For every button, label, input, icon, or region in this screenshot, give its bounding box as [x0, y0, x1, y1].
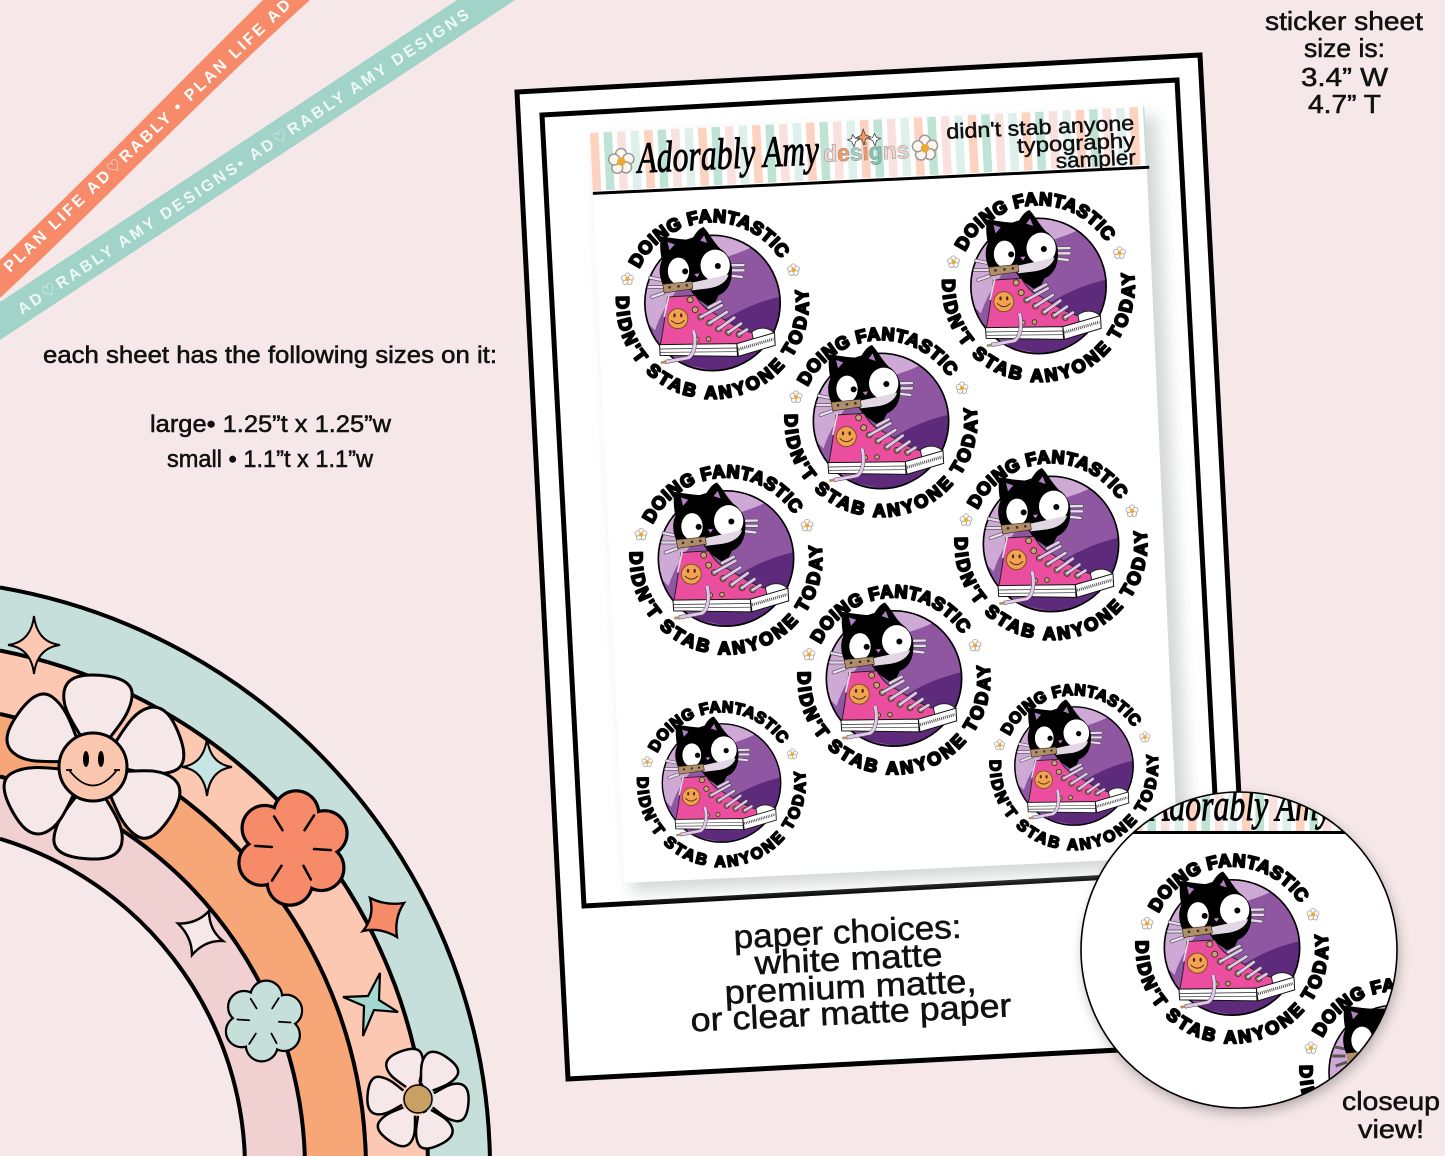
sticker 8 daisies — [994, 732, 1150, 750]
lens header stripes — [1136, 792, 1342, 831]
lens main sticker — [1134, 853, 1330, 1044]
text: paper choices — [690, 908, 1012, 1039]
text: sticker sheet size: sticker sheet — [1265, 6, 1424, 36]
sticker 1: DIDN'T STAB ANYONE TODAY — [615, 289, 810, 400]
sticker 2 daisies — [948, 247, 1126, 268]
icon: white star — [178, 911, 223, 955]
lens partial sticker — [1298, 978, 1393, 1094]
text: sticker sheet size: 3.4” W — [1301, 62, 1389, 92]
text: sizes on each sheet: small • 1.1”t x 1.1”w — [167, 446, 374, 473]
lens partial sticker: DOING FA — [1311, 978, 1393, 1038]
sticker 5 — [954, 450, 1148, 641]
sticker 6 daisies — [803, 639, 981, 660]
sticker 7 small: DIDN'T STAB ANYONE TODAY — [636, 771, 806, 868]
sticker 4 daisies — [635, 519, 813, 540]
sticker 8 small: DIDN'T STAB ANYONE TODAY — [989, 754, 1159, 851]
lens header rule — [1125, 831, 1355, 834]
lens main sticker: DOING FANTASTIC — [1147, 853, 1309, 914]
icon: smiley daisy — [0, 673, 191, 861]
logo daisy right — [912, 135, 938, 160]
sticker 6 — [796, 584, 992, 776]
icon: teal sparkle — [182, 738, 232, 796]
closeup lens shadow — [1083, 797, 1399, 1113]
sticker 1: DOING FANTASTIC — [628, 208, 790, 269]
header rule — [593, 166, 1149, 195]
sticker 3 — [784, 326, 978, 518]
text: sizes on each sheet — [43, 342, 497, 473]
logo sparkles — [847, 128, 881, 147]
partial sticker daisy — [1305, 1042, 1317, 1054]
header title: didn't stab anyone — [946, 112, 1135, 144]
sticker 3: DOING FANTASTIC — [796, 326, 958, 387]
text: paper choices: or clear matte paper — [690, 986, 1012, 1039]
text: sticker sheet size: 4.7” T — [1308, 89, 1381, 119]
ribbon: coral plan life adorably: PLAN LIFE AD♡RABLY • PLAN LIFE AD — [1, 0, 294, 276]
sticker 7 small: DOING FANTASTIC — [647, 700, 789, 753]
sticker 6: DOING FANTASTIC — [809, 584, 971, 644]
sticker 8 small — [989, 683, 1159, 851]
icon: peach sparkle — [8, 616, 60, 674]
icon: teal star — [343, 973, 398, 1036]
sheet header — [590, 107, 1149, 195]
logo designs: designs — [823, 137, 910, 168]
lens main sticker: DIDN'T STAB ANYONE TODAY — [1134, 934, 1330, 1044]
sticker 1 — [615, 208, 810, 400]
sticker 5: DIDN'T STAB ANYONE TODAY — [954, 530, 1148, 641]
sticker 8 small: DOING FANTASTIC — [1000, 683, 1142, 736]
lens sticker daisies — [1141, 908, 1319, 929]
text: paper choices: white matte — [753, 936, 943, 981]
lens partial sticker: DID — [1298, 1065, 1315, 1094]
header stripes — [590, 107, 1147, 191]
logo script: Adorably Amy — [634, 125, 821, 183]
sticker 2 — [941, 192, 1136, 383]
text: closeup view — [1342, 1086, 1440, 1144]
sticker 6: DIDN'T STAB ANYONE TODAY — [796, 664, 992, 776]
ribbon: teal adorably amy designs: AD♡RABLY AMY DESIGNS• AD♡RABLY AMY DESIGNS — [15, 6, 473, 318]
text: sizes on each sheet: each sheet has the following sizes on it: — [43, 342, 497, 369]
sticker 5 daisies — [960, 505, 1138, 526]
sticker 2: DIDN'T STAB ANYONE TODAY — [941, 272, 1136, 383]
text: closeup view: view! — [1358, 1114, 1424, 1144]
sticker sheet — [590, 107, 1178, 883]
text: sticker sheet size — [1265, 6, 1424, 119]
sticker 4: DIDN'T STAB ANYONE TODAY — [628, 544, 824, 656]
sticker 3 daisies — [790, 382, 968, 402]
outer white frame — [517, 55, 1252, 1079]
header title — [946, 112, 1137, 178]
header title: typography — [1017, 129, 1136, 158]
icon: coral star — [363, 898, 404, 937]
header title: sampler — [1055, 146, 1136, 173]
text: sticker sheet size: size is: — [1304, 33, 1385, 63]
sticker 4: DOING FANTASTIC — [641, 464, 803, 524]
text: paper choices: paper choices: — [733, 908, 962, 955]
text: sizes on each sheet: large• 1.25”t x 1.25”w — [150, 411, 392, 438]
sticker 4 — [628, 464, 824, 656]
sticker 7 small — [636, 700, 806, 868]
rainbow — [0, 588, 490, 1156]
sticker 2: DOING FANTASTIC — [954, 192, 1116, 252]
icon: teal flower — [227, 982, 301, 1060]
icon: daisy — [366, 1045, 470, 1153]
sheet shadow — [598, 116, 1190, 892]
sticker 3: DIDN'T STAB ANYONE TODAY — [784, 407, 978, 518]
sticker 5: DOING FANTASTIC — [966, 450, 1128, 510]
sticker 1 daisies — [622, 264, 800, 284]
closeup lens — [1080, 791, 1398, 1109]
inner frame — [542, 80, 1219, 906]
sticker 7 daisies — [642, 749, 798, 767]
icon: coral flower — [240, 792, 346, 904]
text: closeup view: closeup — [1342, 1086, 1440, 1116]
lens logo script: Adorably Amy — [1148, 781, 1332, 830]
logo daisy left — [608, 148, 635, 174]
text: paper choices: premium matte, — [724, 962, 977, 1011]
